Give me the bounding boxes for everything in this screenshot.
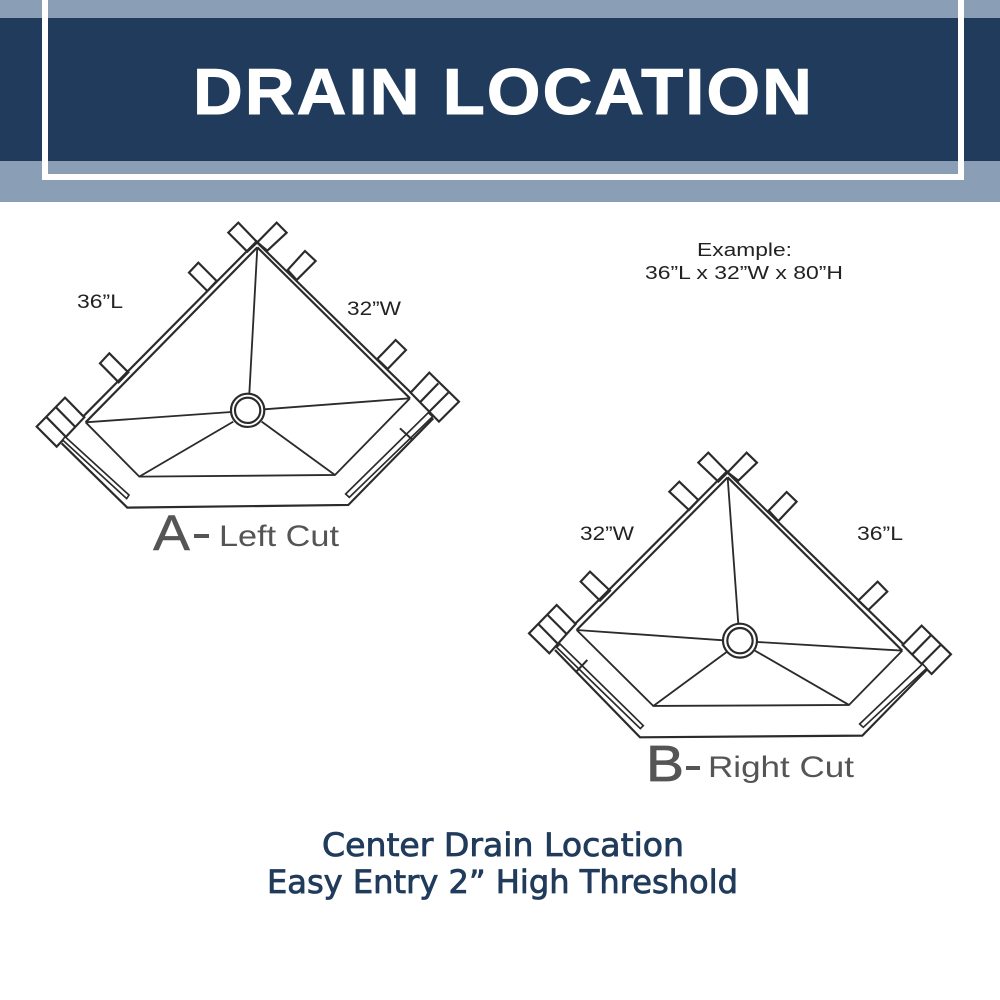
shower base outline B bbox=[555, 471, 927, 737]
hinge left A bbox=[37, 398, 84, 447]
footer text: Center Drain Location bbox=[322, 826, 684, 864]
example note: 36”L x 32”W x 80”H bbox=[645, 263, 843, 283]
hinge right A bbox=[411, 373, 459, 422]
label: 32 W: 32”W bbox=[580, 524, 634, 545]
diagram A: left cut bbox=[37, 223, 459, 508]
label: 32 W: 32”W bbox=[347, 299, 401, 320]
caption: B right cut: B bbox=[646, 735, 684, 792]
label: 36 L: 36”L bbox=[77, 292, 123, 313]
caption: A left cut bbox=[153, 505, 340, 561]
glass panels A bbox=[63, 413, 433, 499]
header banner bbox=[0, 0, 1000, 202]
label: 36 L: 36”L bbox=[857, 524, 903, 545]
icon: wall brackets B bbox=[581, 453, 887, 610]
diagram B: right cut bbox=[529, 453, 951, 737]
title: DRAIN LOCATION bbox=[193, 55, 814, 128]
caption: A left cut: A bbox=[153, 505, 191, 561]
hinge right B bbox=[903, 626, 951, 674]
tray seams B bbox=[577, 477, 902, 706]
hinge left B bbox=[529, 605, 576, 653]
tray seams A bbox=[86, 247, 410, 477]
icon: center drain A bbox=[231, 394, 264, 427]
example note bbox=[645, 240, 843, 283]
footer text bbox=[267, 826, 738, 901]
caption: B right cut bbox=[646, 735, 855, 792]
caption: B right cut: Right Cut bbox=[708, 751, 855, 784]
caption: A left cut: Left Cut bbox=[219, 520, 340, 553]
footer text: Easy Entry 2” High Threshold bbox=[267, 863, 738, 901]
icon: center drain B bbox=[723, 624, 757, 658]
shower base outline A bbox=[62, 241, 433, 508]
icon: wall brackets A bbox=[100, 223, 406, 382]
example note: Example: bbox=[697, 240, 792, 260]
glass panels B bbox=[557, 644, 927, 729]
